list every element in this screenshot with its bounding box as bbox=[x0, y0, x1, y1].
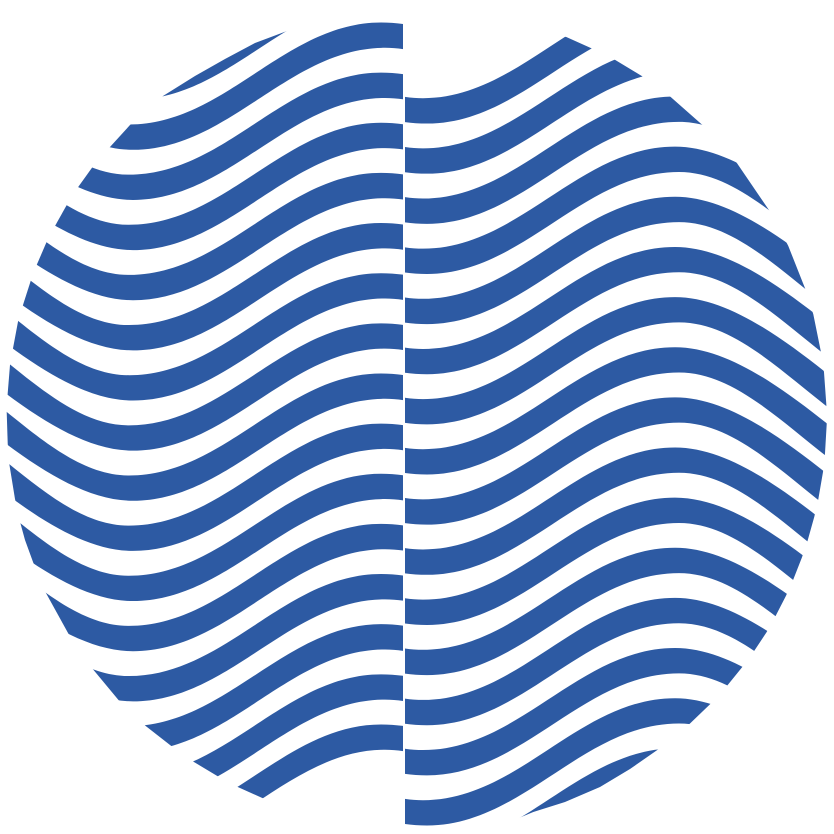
left hemisphere wave stripes bbox=[6, 22, 403, 798]
right hemisphere wave stripes bbox=[396, 0, 834, 834]
